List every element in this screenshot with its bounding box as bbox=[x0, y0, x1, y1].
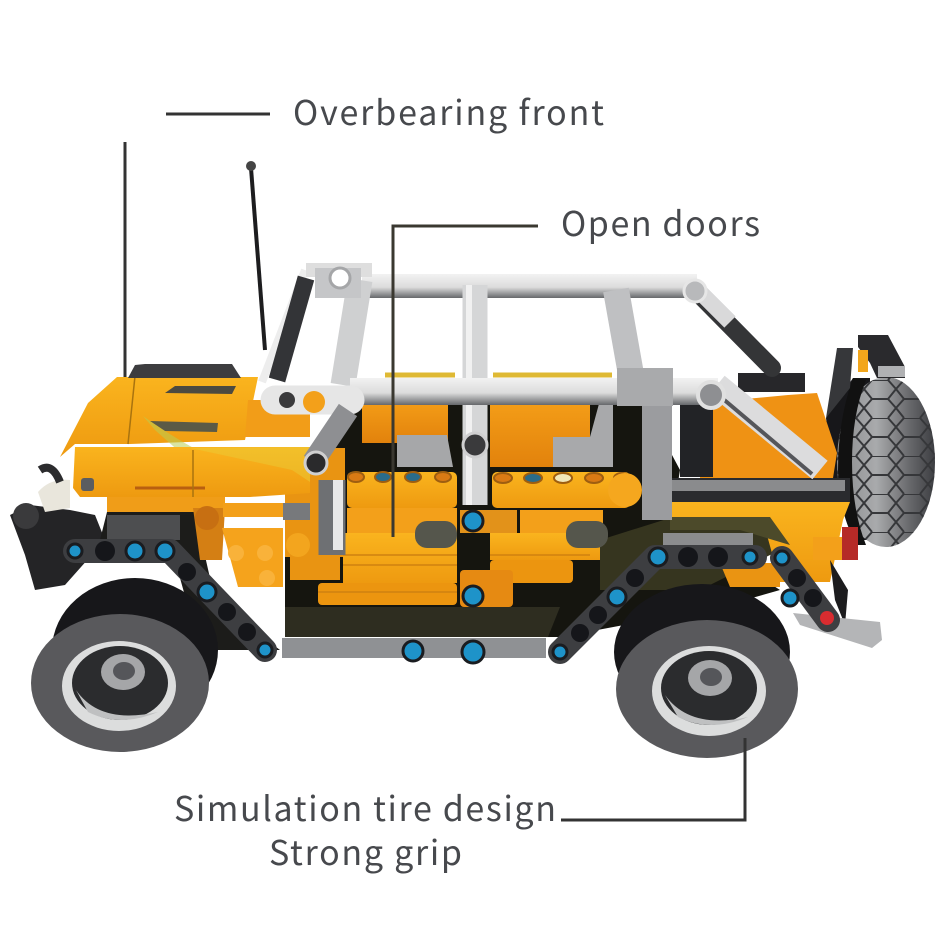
heading: Simulation tire design: Simulation tire design bbox=[174, 782, 556, 831]
roll cage bbox=[262, 268, 820, 557]
front fender panel bbox=[73, 447, 310, 497]
under-fender parts bbox=[95, 497, 310, 650]
antenna bbox=[246, 161, 265, 350]
rear wheel bbox=[614, 584, 798, 758]
front bumper and headlight bbox=[10, 468, 105, 590]
heading: Strong grip: Strong grip bbox=[269, 826, 462, 875]
vehicle bbox=[10, 161, 935, 758]
lower beam chassis bbox=[68, 511, 882, 663]
callout line: tire design bbox=[561, 738, 745, 820]
callout line: Open doors bbox=[393, 226, 538, 537]
rear body bbox=[608, 373, 858, 625]
heading: Overbearing front: Overbearing front bbox=[293, 86, 604, 135]
spare tire bbox=[826, 335, 935, 547]
heading: Open doors: Open doors bbox=[561, 197, 760, 246]
front wheel bbox=[31, 578, 218, 752]
callout line: Overbearing front bbox=[125, 114, 270, 380]
engine hood bbox=[60, 364, 310, 478]
chassis interior bbox=[285, 395, 790, 637]
door section bbox=[290, 398, 630, 607]
